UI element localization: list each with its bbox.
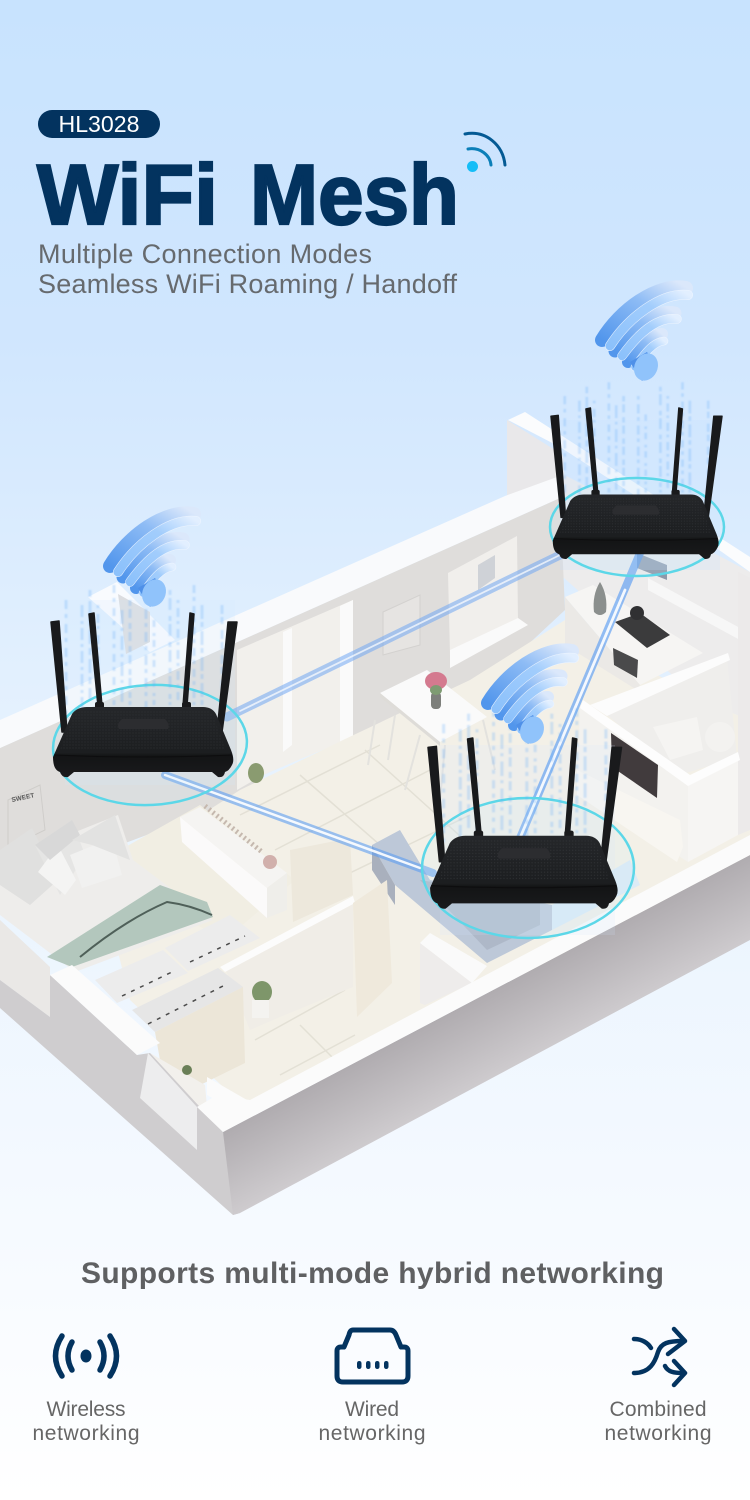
dresser and cream partition bbox=[180, 806, 353, 922]
subtitle text bbox=[38, 239, 457, 299]
subtitle text: Seamless WiFi Roaming / Handoff bbox=[38, 269, 457, 299]
kitchen cabinets, oven and stove bbox=[565, 553, 740, 690]
title: WiFi Mesh: WiFi bbox=[37, 148, 218, 243]
signal particles: top-right router bbox=[565, 382, 708, 506]
wall behind wardrobe bbox=[220, 880, 392, 1030]
left wall window bbox=[140, 1053, 197, 1150]
router coverage ring: left bbox=[50, 680, 250, 810]
title: WiFi Mesh bbox=[37, 148, 459, 243]
sofa bbox=[372, 830, 640, 963]
model badge: HL3028 bbox=[38, 110, 160, 138]
balcony rail and window bbox=[0, 920, 50, 1017]
icon: shuffle arrows bbox=[634, 1329, 685, 1385]
left front wall top bbox=[50, 965, 160, 1055]
icon: small wifi signal beside title bbox=[465, 133, 505, 172]
router: left bbox=[51, 613, 237, 777]
label: wired networking: networking bbox=[318, 1422, 426, 1445]
right back wall face bbox=[555, 470, 750, 720]
right front wall top bbox=[197, 835, 750, 1132]
router: top right bbox=[551, 408, 722, 559]
feature: combined networking bbox=[604, 1329, 712, 1445]
dining table and flowers bbox=[368, 670, 495, 800]
illustration: isometric home floor plan bbox=[0, 412, 750, 1215]
signal haze: top-right router bbox=[560, 420, 720, 570]
signal haze: left router bbox=[65, 600, 235, 785]
floor tile lines bbox=[240, 745, 470, 1075]
subtitle text: Multiple Connection Modes bbox=[38, 239, 372, 269]
walk-in wardrobe bbox=[95, 915, 260, 1090]
label: combined networking: networking bbox=[604, 1422, 712, 1445]
icon: 3D wifi left bbox=[110, 513, 196, 611]
bedroom headboard wall and SWEET sign: SWEET bbox=[11, 792, 35, 804]
bedroom floor bbox=[120, 805, 295, 940]
plant on partition bbox=[248, 763, 264, 783]
bedroom headboard wall and SWEET sign bbox=[8, 785, 45, 848]
TV partition wall bbox=[577, 700, 740, 862]
feature: wireless networking bbox=[32, 1336, 140, 1445]
wall picture bbox=[383, 595, 420, 655]
signal particles: left router bbox=[66, 585, 222, 720]
bathroom bbox=[590, 572, 750, 835]
model badge: HL3028: HL3028 bbox=[58, 111, 140, 137]
connection beam: left router to top-right router bbox=[227, 555, 560, 717]
bed with pillows and green blanket bbox=[0, 815, 213, 972]
heading: hybrid networking: Supports multi-mode hybrid networking bbox=[81, 1257, 664, 1290]
rear window bbox=[448, 536, 518, 655]
signal haze: centre router bbox=[440, 745, 615, 935]
icon: wireless signal bbox=[56, 1336, 116, 1376]
icon: ethernet port bbox=[337, 1330, 408, 1382]
right front wall outer face bbox=[223, 855, 750, 1215]
router: centre bbox=[428, 738, 621, 909]
floor bbox=[100, 620, 750, 1112]
back wall top band bbox=[0, 477, 560, 748]
label: wireless networking: networking bbox=[32, 1422, 140, 1445]
icon: 3D wifi centre bbox=[488, 650, 574, 748]
label: combined networking: Combined bbox=[610, 1398, 706, 1421]
rear right tall wall bbox=[507, 420, 565, 498]
right partition near sofa bbox=[420, 943, 472, 1005]
back wall inner face bbox=[0, 498, 565, 890]
right back wall top bbox=[508, 412, 750, 572]
label: wired networking: Wired bbox=[345, 1398, 399, 1421]
router coverage ring: top right bbox=[550, 478, 724, 576]
router coverage ring: centre bbox=[422, 798, 634, 938]
glass door bbox=[237, 600, 353, 790]
left front wall outer face bbox=[0, 975, 240, 1215]
icon: 3D wifi top right bbox=[602, 287, 688, 385]
rear left wall stub bbox=[88, 582, 175, 652]
signal particles: centre router bbox=[444, 708, 606, 849]
title: WiFi Mesh: Mesh bbox=[250, 148, 459, 243]
connection beam: top-right router to centre router bbox=[520, 553, 640, 838]
lower-left niche bbox=[150, 1053, 247, 1108]
connection beam: left router to centre router bbox=[165, 775, 433, 873]
feature: wired networking bbox=[318, 1330, 426, 1445]
label: wireless networking: Wireless bbox=[46, 1398, 126, 1421]
